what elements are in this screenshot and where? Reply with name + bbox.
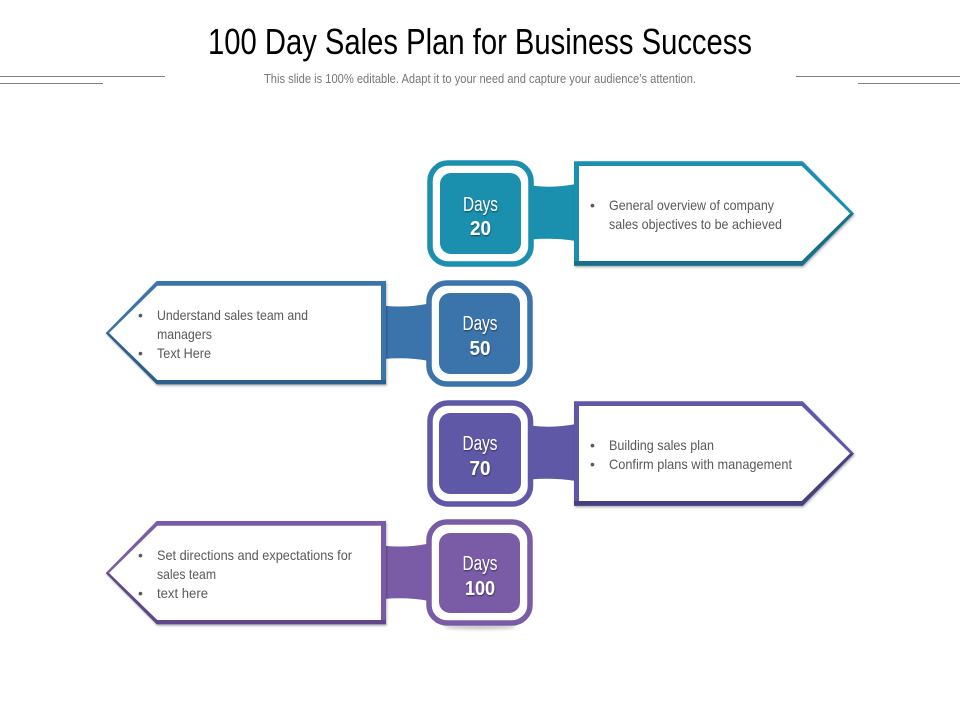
step: days 50: [106, 281, 530, 384]
description: Confirm plans with management: [609, 456, 792, 472]
description: •: [590, 456, 595, 472]
description: [590, 437, 792, 472]
description: Understand sales team and: [157, 307, 308, 323]
badge label: [463, 194, 498, 240]
badge label: [462, 553, 498, 600]
badge: [439, 413, 521, 494]
badge: [439, 293, 520, 374]
description: •: [138, 547, 143, 563]
step: days 100: [106, 521, 530, 630]
description: Set directions and expectations for: [157, 547, 352, 563]
description: sales objectives to be achieved: [609, 216, 782, 232]
badge label: Days: [462, 553, 498, 575]
badge label: Days: [462, 433, 498, 455]
description: sales team: [157, 566, 216, 582]
badge label: 70: [470, 458, 490, 480]
connector: [531, 184, 576, 241]
badge label: 50: [470, 338, 490, 360]
description: •: [138, 345, 143, 361]
description: •: [138, 585, 143, 601]
badge: [440, 173, 521, 254]
connector: [384, 544, 428, 601]
subtitle: This slide is 100% editable. Adapt it to your need and capture your audience’s attention.: [264, 72, 696, 86]
callout arrow: [574, 161, 854, 266]
connector: [530, 424, 576, 481]
description: Text Here: [157, 345, 211, 361]
description: •: [590, 437, 595, 453]
badge: [439, 533, 520, 613]
ring: [429, 283, 530, 384]
description: text here: [157, 585, 208, 601]
description: •: [590, 197, 595, 213]
description: General overview of company: [609, 197, 774, 213]
title: 100 Day Sales Plan for Business Success: [208, 21, 752, 62]
badge label: 20: [470, 218, 491, 240]
description: Building sales plan: [609, 437, 714, 453]
description: managers: [157, 326, 212, 342]
step: days 70: [430, 401, 854, 506]
description: [138, 307, 308, 361]
callout arrow: [106, 521, 386, 624]
description: •: [138, 307, 143, 323]
badge label: [462, 313, 498, 360]
badge label: Days: [462, 313, 498, 335]
badge label: 100: [465, 578, 495, 600]
callout arrow: [106, 281, 386, 384]
step: days 20: [430, 161, 854, 266]
ring: [430, 403, 530, 504]
badge label: [462, 433, 498, 480]
description: [590, 197, 782, 232]
description: [138, 547, 352, 601]
callout arrow: [574, 401, 854, 506]
ring: [429, 522, 530, 623]
ring: [430, 163, 531, 264]
connector: [384, 304, 428, 361]
badge label: Days: [463, 194, 498, 216]
ring shadow: [444, 624, 516, 630]
